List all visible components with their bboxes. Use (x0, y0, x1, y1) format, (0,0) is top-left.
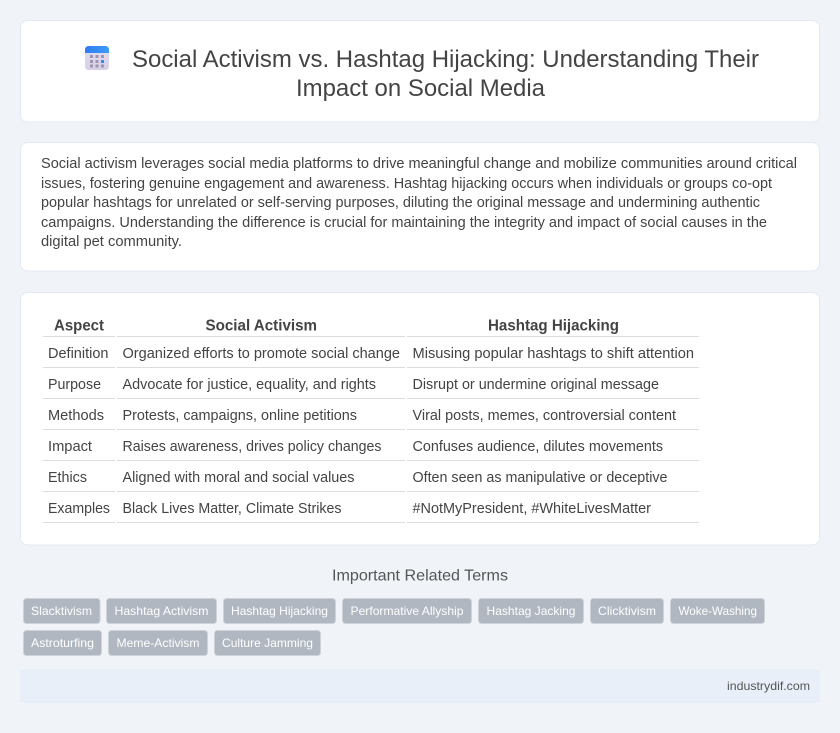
tag: Hashtag Activism: Hashtag Activism (114, 604, 208, 618)
row: definition: Definition (48, 346, 108, 362)
table header: Social Activism (206, 318, 317, 334)
title (132, 46, 759, 102)
row: examples: #NotMyPresident, #WhiteLivesMatter (412, 501, 651, 517)
table header (54, 318, 619, 334)
row: definition (48, 346, 694, 362)
tag: Hashtag Jacking: Hashtag Jacking (486, 604, 576, 618)
footer (20, 669, 820, 703)
tag: Hashtag Hijacking: Hashtag Hijacking (231, 604, 328, 618)
row: definition: Misusing popular hashtags to shift attention (412, 346, 694, 362)
title: Impact on Social Media (296, 75, 546, 102)
footer: industrydif.com (727, 679, 810, 693)
tag: Hashtag Hijacking (224, 598, 336, 624)
row: impact: Impact (48, 439, 92, 455)
tag: Astroturfing: Astroturfing (31, 636, 94, 650)
row: examples: Black Lives Matter, Climate Strikes (122, 501, 342, 517)
tag: Meme-Activism (108, 630, 208, 656)
text block: introduction (41, 156, 797, 250)
row: purpose: Disrupt or undermine original message (412, 377, 659, 393)
row: purpose: Advocate for justice, equality, and rights (122, 377, 376, 393)
tag: Woke-Washing: Woke-Washing (678, 604, 757, 618)
row: ethics: Often seen as manipulative or deceptive (412, 470, 668, 486)
tag: Astroturfing (24, 630, 102, 656)
header panel (20, 20, 820, 122)
tag: Culture Jamming: Culture Jamming (222, 636, 313, 650)
icon: calendar (85, 46, 109, 70)
row: ethics: Aligned with moral and social values (122, 470, 354, 486)
row: examples: Examples (48, 501, 110, 517)
row: impact (48, 439, 663, 455)
row: methods: Methods (48, 408, 104, 424)
row: methods (48, 408, 676, 424)
title: Social Activism vs. Hashtag Hijacking: Understanding Their (132, 46, 759, 73)
row: impact: Confuses audience, dilutes movements (412, 439, 663, 455)
tag: Clicktivism: Clicktivism (598, 604, 656, 618)
tag: Culture Jamming (214, 630, 320, 656)
related term tags (24, 598, 764, 656)
tag: Hashtag Jacking (478, 598, 584, 624)
row: methods: Protests, campaigns, online petitions (122, 408, 357, 424)
tag: Woke-Washing (670, 598, 764, 624)
row: ethics (48, 470, 668, 486)
panel: comparison table (20, 292, 820, 545)
row: examples (48, 501, 651, 517)
tag: Performative Allyship (342, 598, 472, 624)
row: purpose (48, 377, 659, 393)
tag: Meme-Activism: Meme-Activism (116, 636, 200, 650)
table header: Aspect (54, 318, 105, 334)
text block: introduction: digital pet community. (41, 234, 182, 250)
text block: introduction: Social activism leverages social media platforms to drive meaningful change and mobilize communities around critical (41, 156, 797, 172)
row: definition: Organized efforts to promote social change (122, 346, 400, 362)
row: ethics: Ethics (48, 470, 87, 486)
tag: Hashtag Activism (106, 598, 216, 624)
text block: introduction: issues, fostering genuine engagement and awareness. Hashtag hijacking occurs when individuals or groups co-opt (41, 176, 772, 192)
tag: Slacktivism: Slacktivism (31, 604, 92, 618)
text block: introduction: campaigns. Understanding the difference is crucial for maintaining the integrity and impact of social causes in the (41, 215, 767, 231)
row: methods: Viral posts, memes, controversial content (412, 408, 676, 424)
tag: Clicktivism (590, 598, 664, 624)
panel: description (20, 142, 820, 271)
tag: Slacktivism (24, 598, 100, 624)
table header: Hashtag Hijacking (488, 318, 619, 334)
tag: Performative Allyship: Performative Allyship (350, 604, 464, 618)
row: impact: Raises awareness, drives policy changes (122, 439, 382, 455)
row: purpose: Purpose (48, 377, 101, 393)
text block: introduction: popular hashtags for unrelated or self-serving purposes, diluting the original message and undermining authentic (41, 195, 760, 211)
heading: related terms: Important Related Terms (332, 568, 508, 584)
